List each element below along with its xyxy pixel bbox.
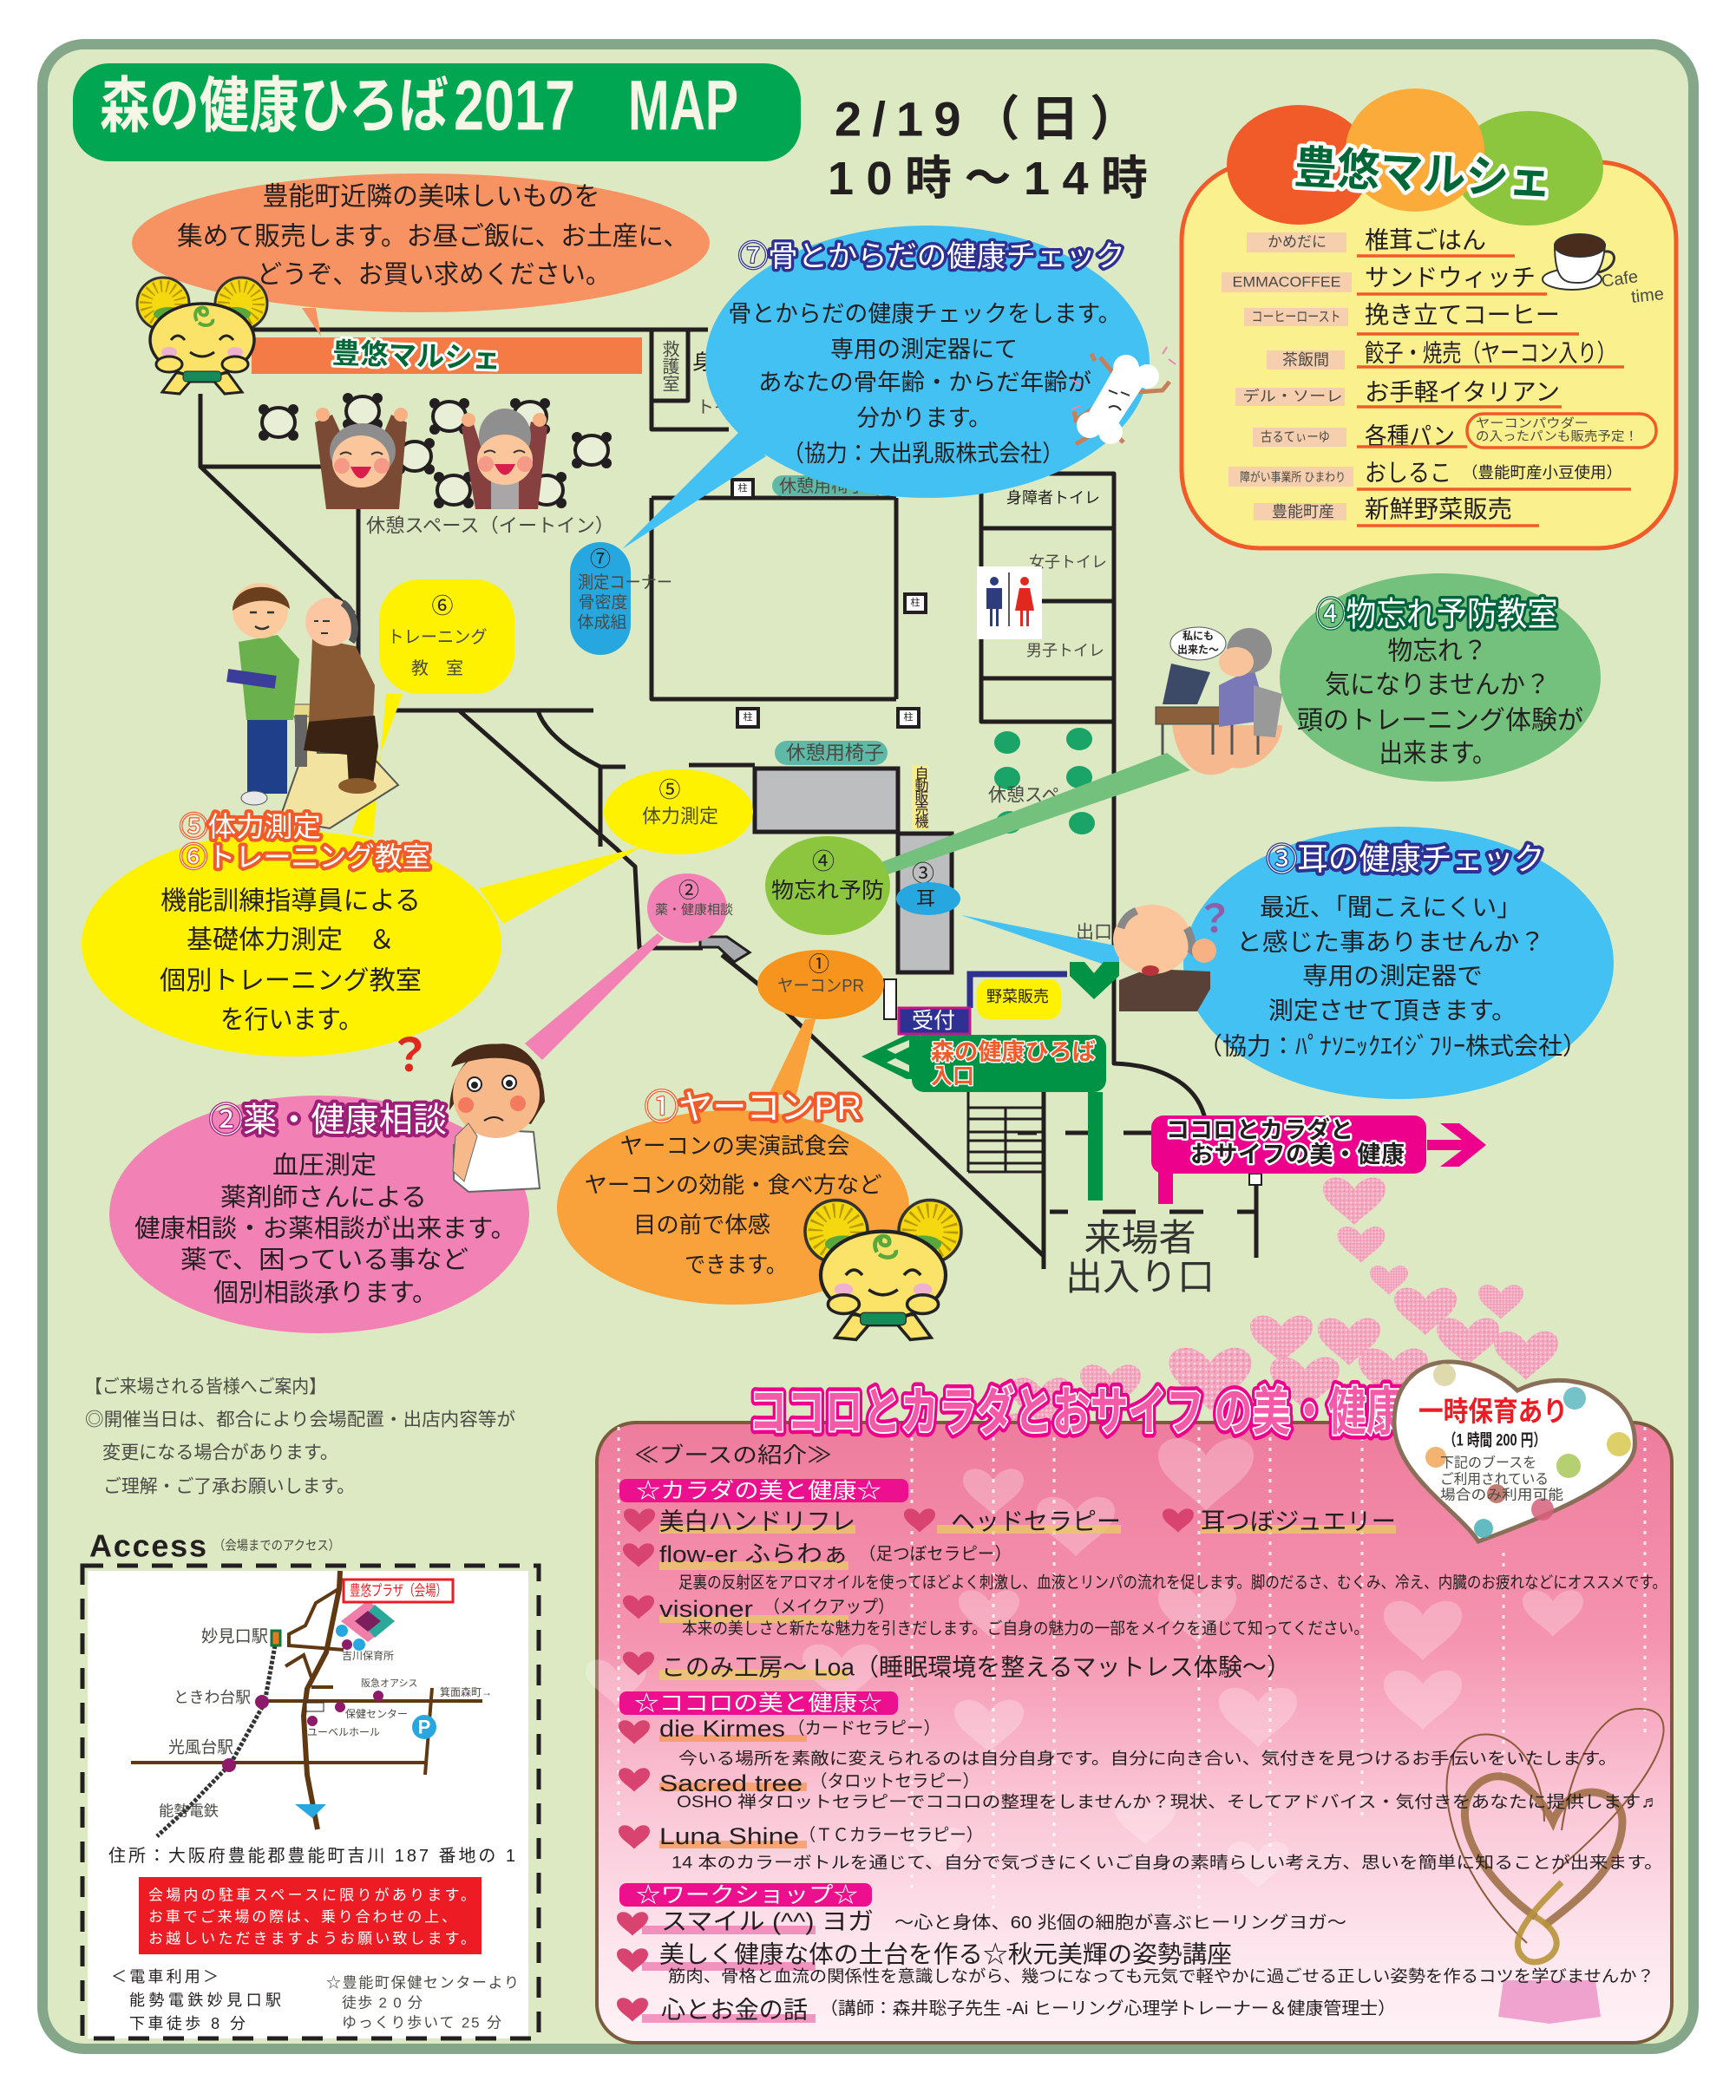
booth list text: （メイクアップ） — [763, 1597, 894, 1617]
vendor names: かめだに — [1268, 234, 1327, 250]
title banner: MAP — [628, 66, 738, 146]
highlights under booth names — [642, 1525, 1396, 2023]
panel: fitness callout — [82, 694, 642, 1057]
illustration: woman at laptop: 私にも — [1182, 629, 1214, 642]
bread note: ヤーコンパウダー — [1476, 416, 1589, 431]
booth 7: measuring corner — [570, 542, 672, 655]
panel: memory classroom callout — [1280, 573, 1601, 782]
booth list text: このみ工房～ Loa（睡眠環境を整えるマットレス体験～） — [661, 1653, 1291, 1681]
booth list text: 耳つぼジュエリー — [1201, 1508, 1396, 1535]
big title: ココロとカラダとおサイフ の美・健康 — [750, 1383, 1404, 1442]
menu items: 椎茸ごはん — [1365, 227, 1486, 253]
parking notice: 会場内の駐車スペースに限りがあります。 — [148, 1887, 475, 1903]
section: body beauty: ☆カラダの美と健康☆ — [636, 1479, 881, 1503]
panel: ear health callout: （協力：ﾊﾟﾅｿﾆｯｸｴｲｼﾞﾌﾘｰ株式会社） — [1198, 1032, 1587, 1060]
booth 7: measuring corner: 骨密度 — [578, 593, 628, 612]
booth 5: fitness check: 体力測定 — [642, 805, 718, 828]
vendor names: EMMACOFFEE — [1232, 274, 1341, 290]
bread note — [1467, 414, 1656, 448]
parking notice: お車でご来場の際は、乗り合わせの上、 — [148, 1908, 456, 1926]
booth list text: die Kirmes — [659, 1716, 785, 1742]
illustration: woman at laptop — [1156, 627, 1282, 775]
map labels: 吉川保育所 — [342, 1649, 394, 1662]
vendor names: デル・ソーレ — [1242, 387, 1343, 404]
panel: pharmacy consultation callout: 薬で、困っている事など — [180, 1246, 468, 1274]
booth list text: （講師：森井聡子先生 -Ai ヒーリング心理学トレーナー＆健康管理士） — [820, 1999, 1396, 2018]
menu items — [1365, 227, 1622, 522]
booth 6: training room — [379, 579, 514, 694]
panel: fitness callout: 機能訓練指導員による — [160, 886, 421, 916]
booth list text: （タロットセラピー） — [810, 1771, 979, 1791]
booth 2: pharmacy — [647, 873, 733, 943]
arrow: heart wellness sign: おサイフの美・健康 — [1190, 1142, 1405, 1168]
illustration: elderly woman cheering — [462, 409, 547, 509]
cafe time text — [1601, 267, 1665, 307]
illustration: elderly man listening: ？ — [1196, 899, 1234, 940]
panel: pharmacy consultation callout: 血圧測定 — [272, 1151, 377, 1180]
panel: ear health callout: 測定させて頂きます。 — [1268, 998, 1517, 1024]
menu items: 新鮮野菜販売 — [1365, 496, 1512, 522]
booth 2: pharmacy: ② — [678, 880, 699, 902]
first aid room label: 救護室 — [659, 340, 679, 392]
panel: bone health callout: 骨とからだの健康チェックをします。 — [729, 301, 1121, 327]
heading: fitness and training: ⑥トレーニング教室 — [180, 841, 430, 873]
reception and vegetable stall: 受付 — [912, 1009, 955, 1033]
panel: memory classroom callout: 物忘れ？ — [1388, 637, 1487, 666]
teal rest chair labels — [772, 475, 888, 765]
illustration: trainer and exercise bike — [226, 583, 398, 828]
rest seating: tables — [259, 393, 612, 508]
panel: ear health callout: 最近、「聞こえにくい」 — [1260, 893, 1522, 921]
notice text — [85, 1377, 515, 1497]
pillars — [732, 480, 926, 727]
menu items: お手軽イタリアン — [1365, 378, 1560, 406]
road map — [131, 1571, 482, 1836]
vending machine label: 自動販売機 — [913, 766, 928, 828]
address: 住所：大阪府豊能郡豊能町吉川 187 番地の 1 — [108, 1846, 515, 1866]
panel: marche intro callout: 集めて販売します。お昼ご飯に、お土産に、 — [177, 222, 689, 252]
arrow: heart wellness sign — [1151, 1115, 1486, 1204]
train directions — [111, 1968, 281, 2032]
heading: 豊悠マルシェ — [1293, 142, 1553, 206]
heart bullets — [617, 1508, 1194, 2022]
panel: yacon PR callout: できます。 — [685, 1252, 787, 1278]
access heading: （会場までのアクセス） — [213, 1539, 340, 1553]
booth list text: 本来の美しさと新たな魅力を引きだします。ご自身の魅力の一部をメイクを通じて知ってください。 — [682, 1619, 1369, 1638]
child care heart: 場合のみ利用可能 — [1440, 1487, 1563, 1502]
decorative dotted lines — [619, 1427, 1645, 1908]
venue label — [344, 1580, 453, 1602]
map labels: ときわ台駅 — [174, 1689, 251, 1706]
train directions: ＜電車利用＞ — [111, 1968, 219, 1986]
exit label: 出口 — [1076, 923, 1112, 942]
notice text: ご理解・ご了承お願いします。 — [103, 1476, 355, 1497]
booth 5: fitness check — [604, 769, 753, 854]
panel: ear health callout: と感じた事ありませんか？ — [1236, 928, 1545, 956]
panel: memory classroom callout: 気になりませんか？ — [1325, 671, 1550, 699]
menu items: おしるこ — [1365, 460, 1451, 486]
panel: yacon PR callout: 目の前で体感 — [633, 1212, 770, 1238]
parking notice — [139, 1877, 481, 1954]
booth list text: OSHO 禅タロットセラピーでココロの整理をしませんか？現状、そしてアドバイス・気付きをあなたに提供します♬ — [677, 1792, 1660, 1811]
scattered pink hearts — [1002, 1178, 1558, 1466]
booth list text: Sacred tree — [659, 1770, 802, 1796]
big title: ココロとカラダとおサイフ の美・健康 — [750, 1383, 1404, 1442]
panel: pharmacy consultation callout: 健康相談・お薬相談が出来ます。 — [134, 1214, 516, 1243]
restroom area labels: 男子トイレ — [1026, 642, 1104, 659]
walking directions: ゆっくり歩いて 25 分 — [342, 2014, 501, 2031]
icon: red question mark: ？ — [387, 1031, 432, 1082]
cafe time text: Cafe — [1601, 267, 1639, 291]
map labels: ユーベルホール — [307, 1726, 380, 1738]
arrow: health plaza entrance: 森の健康ひろば — [931, 1039, 1096, 1065]
heading: fitness and training: ⑤体力測定 — [180, 811, 321, 842]
booth list text: 筋肉、骨格と血流の関係性を意識しながら、幾つになっても元気で軽やかに過ごせる正しい姿勢を作るコツを学びませんか？ — [668, 1967, 1654, 1986]
marche bar on map: 豊悠マルシェ — [331, 337, 501, 375]
access heading — [89, 1528, 340, 1563]
vendor names: 豊能町産 — [1272, 503, 1334, 520]
booth 6: training room: 教 室 — [411, 658, 463, 678]
booth list text: ～心と身体、60 兆個の細胞が喜ぶヒーリングヨガ～ — [894, 1913, 1346, 1933]
marche bar on map — [252, 337, 642, 375]
notice text: 【ご来場される皆様へご案内】 — [85, 1377, 326, 1397]
cafe time text: time — [1630, 285, 1665, 307]
panel: access map — [82, 1566, 539, 2038]
child care heart: ご利用されている — [1440, 1471, 1549, 1487]
reception and vegetable stall — [884, 974, 1067, 1034]
illustration: worried woman — [449, 1043, 545, 1192]
booth 7: measuring corner: 体成組 — [577, 612, 627, 631]
booth 3: ear — [896, 860, 960, 915]
road map: P — [418, 1716, 430, 1738]
panel: ear health callout: 専用の測定器で — [1302, 963, 1483, 989]
booth 1: yacon — [757, 950, 884, 1019]
panel: fitness callout: 基礎体力測定 ＆ — [187, 926, 395, 954]
panel: fitness callout: 個別トレーニング教室 — [160, 966, 422, 996]
child care heart: （1 時間 200 円） — [1444, 1431, 1546, 1450]
panel: bone health callout: （協力：大出乳販株式会社） — [783, 441, 1064, 467]
heading: fitness and training — [180, 811, 430, 873]
map labels: 阪急オアシス — [361, 1677, 418, 1689]
booth 4: memory — [765, 836, 890, 935]
restroom area labels: 女子トイレ — [1029, 553, 1107, 571]
map labels — [159, 1627, 492, 1820]
restroom area labels — [692, 350, 1107, 659]
booth list text: （足つぼセラピー） — [859, 1544, 1012, 1564]
booth list text: スマイル (^^) ヨガ — [661, 1908, 874, 1934]
title banner: 2017 — [454, 66, 575, 146]
rest space label east: 休憩スペース — [988, 786, 1095, 805]
booth list text: Luna Shine — [659, 1823, 799, 1849]
arrow: health plaza entrance: 入口 — [931, 1064, 974, 1089]
booth 6: training room: トレーニング — [387, 627, 488, 647]
child care heart: 下記のブースを — [1440, 1454, 1536, 1471]
booth 1: yacon: ① — [809, 952, 829, 977]
menu items: 各種パン — [1365, 423, 1455, 449]
vendor names: コーヒーロースト — [1251, 311, 1341, 324]
icon: coffee cup — [1543, 234, 1614, 290]
panel: marche intro callout — [132, 173, 710, 337]
section: workshop: ☆ワークショップ☆ — [636, 1883, 858, 1907]
gray booth blocks — [700, 769, 952, 972]
teal rest chair labels: 休憩用椅子 — [786, 743, 884, 763]
rest area green dots — [994, 728, 1095, 834]
menu items: （豊能町産小豆使用） — [1462, 464, 1622, 481]
access heading: Access — [89, 1528, 206, 1563]
panel: memory classroom callout: 頭のトレーニング体験が — [1297, 706, 1583, 736]
booth list text: 心とお金の話 — [661, 1997, 808, 2023]
icon: restroom sign — [977, 566, 1042, 639]
booth list text: 美白ハンドリフレ — [659, 1508, 855, 1535]
vendor names: 障がい事業所 ひまわり — [1240, 470, 1346, 484]
panel: bone health callout: ⑦骨とからだの健康チェック — [738, 240, 1125, 273]
panel: ear health callout: ③耳の健康チェック — [1267, 841, 1544, 876]
event date and time: 10時～14時 — [828, 153, 1148, 205]
notice text: 変更になる場合があります。 — [102, 1443, 338, 1462]
notice text: ◎開催当日は、都合により会場配置・出店内容等が — [85, 1410, 515, 1429]
pillars: 柱 — [737, 481, 748, 494]
panel: pharmacy consultation callout: ②薬・健康相談 — [209, 1102, 447, 1140]
event date and time — [828, 92, 1148, 205]
teal rest chair labels: 休憩用椅子 — [779, 476, 866, 496]
venue label: 豊悠プラザ（会場） — [350, 1582, 447, 1600]
parking notice: お越しいただきますようお願い致します。 — [148, 1931, 475, 1946]
panel: memory classroom callout: ④物忘れ予防教室 — [1315, 597, 1558, 633]
panel: yacon PR callout: ①ヤーコンPR — [645, 1089, 861, 1127]
arrow: health plaza entrance — [861, 1035, 1106, 1200]
walking directions — [326, 1974, 519, 2031]
illustration: elderly man cheering — [315, 408, 408, 509]
panel: pharmacy consultation callout: 個別相談承ります。 — [213, 1279, 437, 1307]
panel: booth introduction — [586, 1362, 1672, 2043]
booth 7: measuring corner: 測定コーナー — [578, 572, 672, 592]
vendor name pills — [1222, 232, 1353, 520]
restroom area labels: 身障者トイレ — [1006, 489, 1100, 507]
arrow: green exit down — [1070, 962, 1119, 999]
pillars: 柱 — [904, 710, 913, 723]
illustration: woman at laptop: 出来た～ — [1177, 643, 1219, 656]
booth 7: measuring corner: ⑦ — [590, 548, 611, 571]
pillars: 柱 — [911, 596, 920, 608]
walking directions: ☆豊能町保健センターより — [326, 1974, 519, 1992]
booth list text: 今いる場所を素敵に変えられるのは自分自身です。自分に向き合い、気付きを見つけるお手伝いをいたします。 — [678, 1749, 1617, 1768]
booth list text: flow-er ふらわぁ — [659, 1541, 848, 1567]
menu items: サンドウィッチ — [1365, 264, 1536, 291]
visitor entrance label: 出入り口 — [1065, 1257, 1215, 1299]
booth 6: training room: ⑥ — [431, 594, 454, 618]
child care heart: 一時保育あり — [1418, 1396, 1568, 1427]
menu items: 挽き立てコーヒー — [1365, 302, 1560, 328]
vendor names: 茶飯間 — [1282, 351, 1329, 369]
panel: yacon PR callout: ヤーコンの実演試食会 — [619, 1133, 850, 1159]
visitor entrance label — [1065, 1218, 1215, 1299]
map labels: 能勢電鉄 — [159, 1802, 219, 1820]
vendor names — [1232, 234, 1346, 520]
panel: pharmacy consultation callout: 薬剤師さんによる — [220, 1183, 427, 1212]
title banner: 森の健康ひろば — [100, 72, 449, 140]
panel: bone health callout: あなたの骨年齢・からだ年齢が — [758, 370, 1091, 396]
pillars: 柱 — [743, 710, 753, 723]
booth 3: ear: ③ — [912, 860, 934, 886]
underlines — [1357, 256, 1631, 526]
restroom area labels: トイ — [697, 398, 731, 417]
rest space label: 休憩スペース（イートイン） — [366, 515, 614, 536]
panel: fitness callout: を行います。 — [220, 1006, 363, 1034]
panel: yacon PR callout: ヤーコンの効能・食べ方など — [585, 1172, 881, 1198]
map labels: 箕面森町→ — [440, 1685, 492, 1698]
swirl heart illustration — [1447, 1709, 1664, 2024]
event date and time: 2/19（日） — [835, 92, 1138, 146]
restroom area labels: 身 — [692, 350, 713, 375]
bread note: の入ったパンも販売予定！ — [1476, 429, 1638, 444]
map labels: 保健センター — [345, 1708, 408, 1720]
panel: ear health callout — [961, 827, 1614, 1099]
panel: marche intro callout: どうぞ、お買い求めください。 — [257, 260, 611, 290]
map labels: 光風台駅 — [168, 1738, 233, 1757]
menu items: 餃子・焼売（ヤーコン入り） — [1365, 340, 1616, 366]
panel: yacon PR callout — [557, 1019, 909, 1305]
pale background hearts — [586, 1438, 1583, 1888]
panel: bone health callout: 専用の測定器にて — [830, 337, 1018, 363]
reception and vegetable stall: 野菜販売 — [986, 988, 1049, 1005]
header circles — [1227, 88, 1603, 226]
illustration: muscle bone — [1071, 347, 1176, 444]
booth list text: 14 本のカラーボトルを通じて、自分で気づきにくいご自身の素晴らしい考え方、思いを簡単に知ることが出来ます。 — [671, 1853, 1663, 1872]
booth 4: memory: 物忘れ予防 — [771, 879, 884, 903]
booth list text: visioner — [659, 1596, 753, 1622]
vendor names: 古るてぃーゆ — [1261, 430, 1330, 444]
booth 4: memory: ④ — [812, 848, 835, 874]
panel: bone health callout: 分かります。 — [857, 405, 991, 431]
callout beam: memory booth — [868, 753, 1190, 881]
section: mind beauty: ☆ココロの美と健康☆ — [634, 1691, 882, 1716]
booth 2: pharmacy: 薬・健康相談 — [655, 902, 733, 918]
walking directions: 徒歩 2 0 分 — [342, 1995, 423, 2011]
floor plan walls — [200, 330, 1256, 1269]
panel: memory classroom callout: 出来ます。 — [1379, 739, 1496, 769]
mascot: top left — [137, 278, 267, 394]
mascot: bottom right of yacon — [805, 1200, 961, 1339]
booth 3: ear: 耳 — [916, 888, 935, 909]
panel: pharmacy consultation callout — [109, 933, 664, 1333]
train directions: 能勢電鉄妙見口駅 — [129, 1992, 281, 2009]
booth 5: fitness check: ⑤ — [658, 778, 681, 802]
train directions: 下車徒歩 8 分 — [129, 2015, 246, 2032]
booth list text: 美しく健康な体の土台を作る☆秋元美輝の姿勢講座 — [659, 1941, 1232, 1967]
booth 1: yacon: ヤーコンPR — [777, 977, 864, 996]
title banner — [73, 63, 801, 161]
illustration: elderly man listening — [1113, 899, 1234, 1011]
panel: Toyuu Marche vendor list — [1182, 88, 1676, 548]
arrow: heart wellness sign: ココロとカラダと — [1166, 1116, 1353, 1143]
booth list text: ヘッドセラピー — [951, 1508, 1121, 1535]
panel: marche intro callout: 豊能町近隣の美味しいものを — [262, 182, 600, 212]
panel: bone health callout — [622, 226, 1150, 549]
booth list text — [659, 1508, 1667, 2023]
booth list text: （カードセラピー） — [788, 1718, 940, 1738]
intro heading: ≪ブースの紹介≫ — [634, 1443, 832, 1468]
booth list text: （ＴＣカラーセラピー） — [799, 1825, 983, 1845]
visitor entrance label: 来場者 — [1084, 1218, 1196, 1259]
map labels: 妙見口駅 — [201, 1627, 268, 1646]
child care heart — [1394, 1362, 1634, 1541]
